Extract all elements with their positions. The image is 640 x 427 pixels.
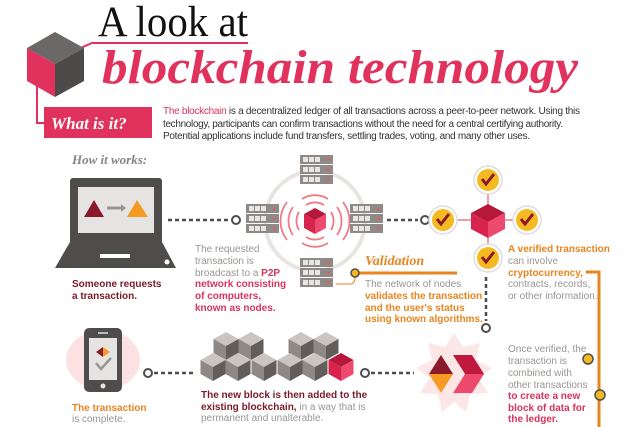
- text: once verified: the ledger.: [508, 414, 558, 425]
- text: verified transaction: cryptocurrency,: [508, 268, 583, 279]
- text block: definition: Potential applications include fund transfers, settling trades, voting, and many other uses.: [163, 131, 530, 142]
- text: broadcast to P2P: of computers,: [195, 291, 261, 302]
- text: validation description: The network of nodes: [365, 279, 461, 290]
- text: once verified: Once verified, the: [508, 344, 587, 355]
- title: blockchain technology: blockchain technology: [102, 41, 579, 94]
- connector line: [37, 81, 45, 123]
- text: verified transaction: A verified transaction: [508, 244, 610, 255]
- text: broadcast to P2P: transaction is: [195, 256, 254, 267]
- arrow: dotted connector 1: [168, 216, 240, 224]
- heading box: What is it?: [44, 107, 152, 138]
- text: broadcast to P2P: network consisting: [195, 279, 286, 290]
- arrow: dotted connector 2: [387, 216, 429, 224]
- text: broadcast to P2P: The requested: [195, 244, 260, 255]
- text: verified transaction: contracts, records,: [508, 279, 590, 290]
- text block: definition: The blockchain is a decentralized ledger of all transactions across a peer-to-peer network. Using this: [163, 106, 580, 117]
- text: once verified: combined with: [508, 368, 572, 379]
- text: verified transaction: or other information.: [508, 291, 598, 302]
- text: validation description: validates the transaction: [365, 291, 482, 302]
- arrow: dotted connector 3: [361, 369, 414, 377]
- text: new block added: existing blockchain, in a way that is: [201, 402, 366, 413]
- text: new block added: [201, 390, 368, 424]
- text block: definition: technology, participants can confirm transactions without the need for a central certifying authority.: [163, 119, 563, 130]
- text block: definition: [163, 106, 580, 142]
- text: broadcast to P2P: [195, 244, 286, 314]
- text: transaction complete: [72, 403, 146, 425]
- network diagram: [246, 155, 383, 287]
- heading box: What is it?: What is it?: [51, 114, 127, 133]
- text: transaction complete: The transaction: [72, 403, 146, 414]
- text: Someone requests a transaction: [72, 279, 162, 302]
- validation line: [336, 269, 457, 284]
- validation cluster: [429, 166, 541, 272]
- text: once verified: other transactions: [508, 380, 588, 391]
- text: Someone requests a transaction: Someone requests: [72, 279, 162, 290]
- title underline: [53, 43, 248, 60]
- text: verified transaction: [508, 244, 610, 302]
- text: verified transaction: can involve: [508, 256, 558, 267]
- heading: Validation: Validation: [365, 254, 424, 269]
- icon: new block starburst: [416, 333, 492, 412]
- text: broadcast to P2P: broadcast to a P2P: [195, 268, 280, 279]
- heading: How it works: How it works:: [71, 152, 147, 167]
- text: transaction complete: is complete.: [72, 414, 125, 425]
- arrow: dotted connector 4: [144, 369, 195, 377]
- text: once verified: to create a new: [508, 391, 580, 402]
- text: once verified: block of data for: [508, 403, 586, 414]
- text: new block added: The new block is then added to the: [201, 390, 368, 401]
- text: broadcast to P2P: known as nodes.: [195, 303, 276, 314]
- icon: blockchain cubes: [200, 332, 354, 381]
- text: Someone requests a transaction: a transaction.: [72, 291, 137, 302]
- text: validation description: and the user's status: [365, 303, 465, 314]
- icon: phone: [66, 328, 140, 392]
- text: new block added: permanent and unalterable.: [201, 413, 323, 424]
- icon: laptop: [55, 178, 176, 268]
- arrow: vertical dotted: [482, 277, 490, 332]
- text: validation description: [365, 279, 483, 325]
- orange bracket line: [583, 272, 605, 427]
- icon: title cube: [27, 32, 84, 97]
- title: A look at: A look at: [98, 0, 248, 46]
- text: once verified: transaction is: [508, 356, 567, 367]
- text: validation description: using known algorithms.: [365, 314, 483, 325]
- text: once verified: [508, 344, 588, 425]
